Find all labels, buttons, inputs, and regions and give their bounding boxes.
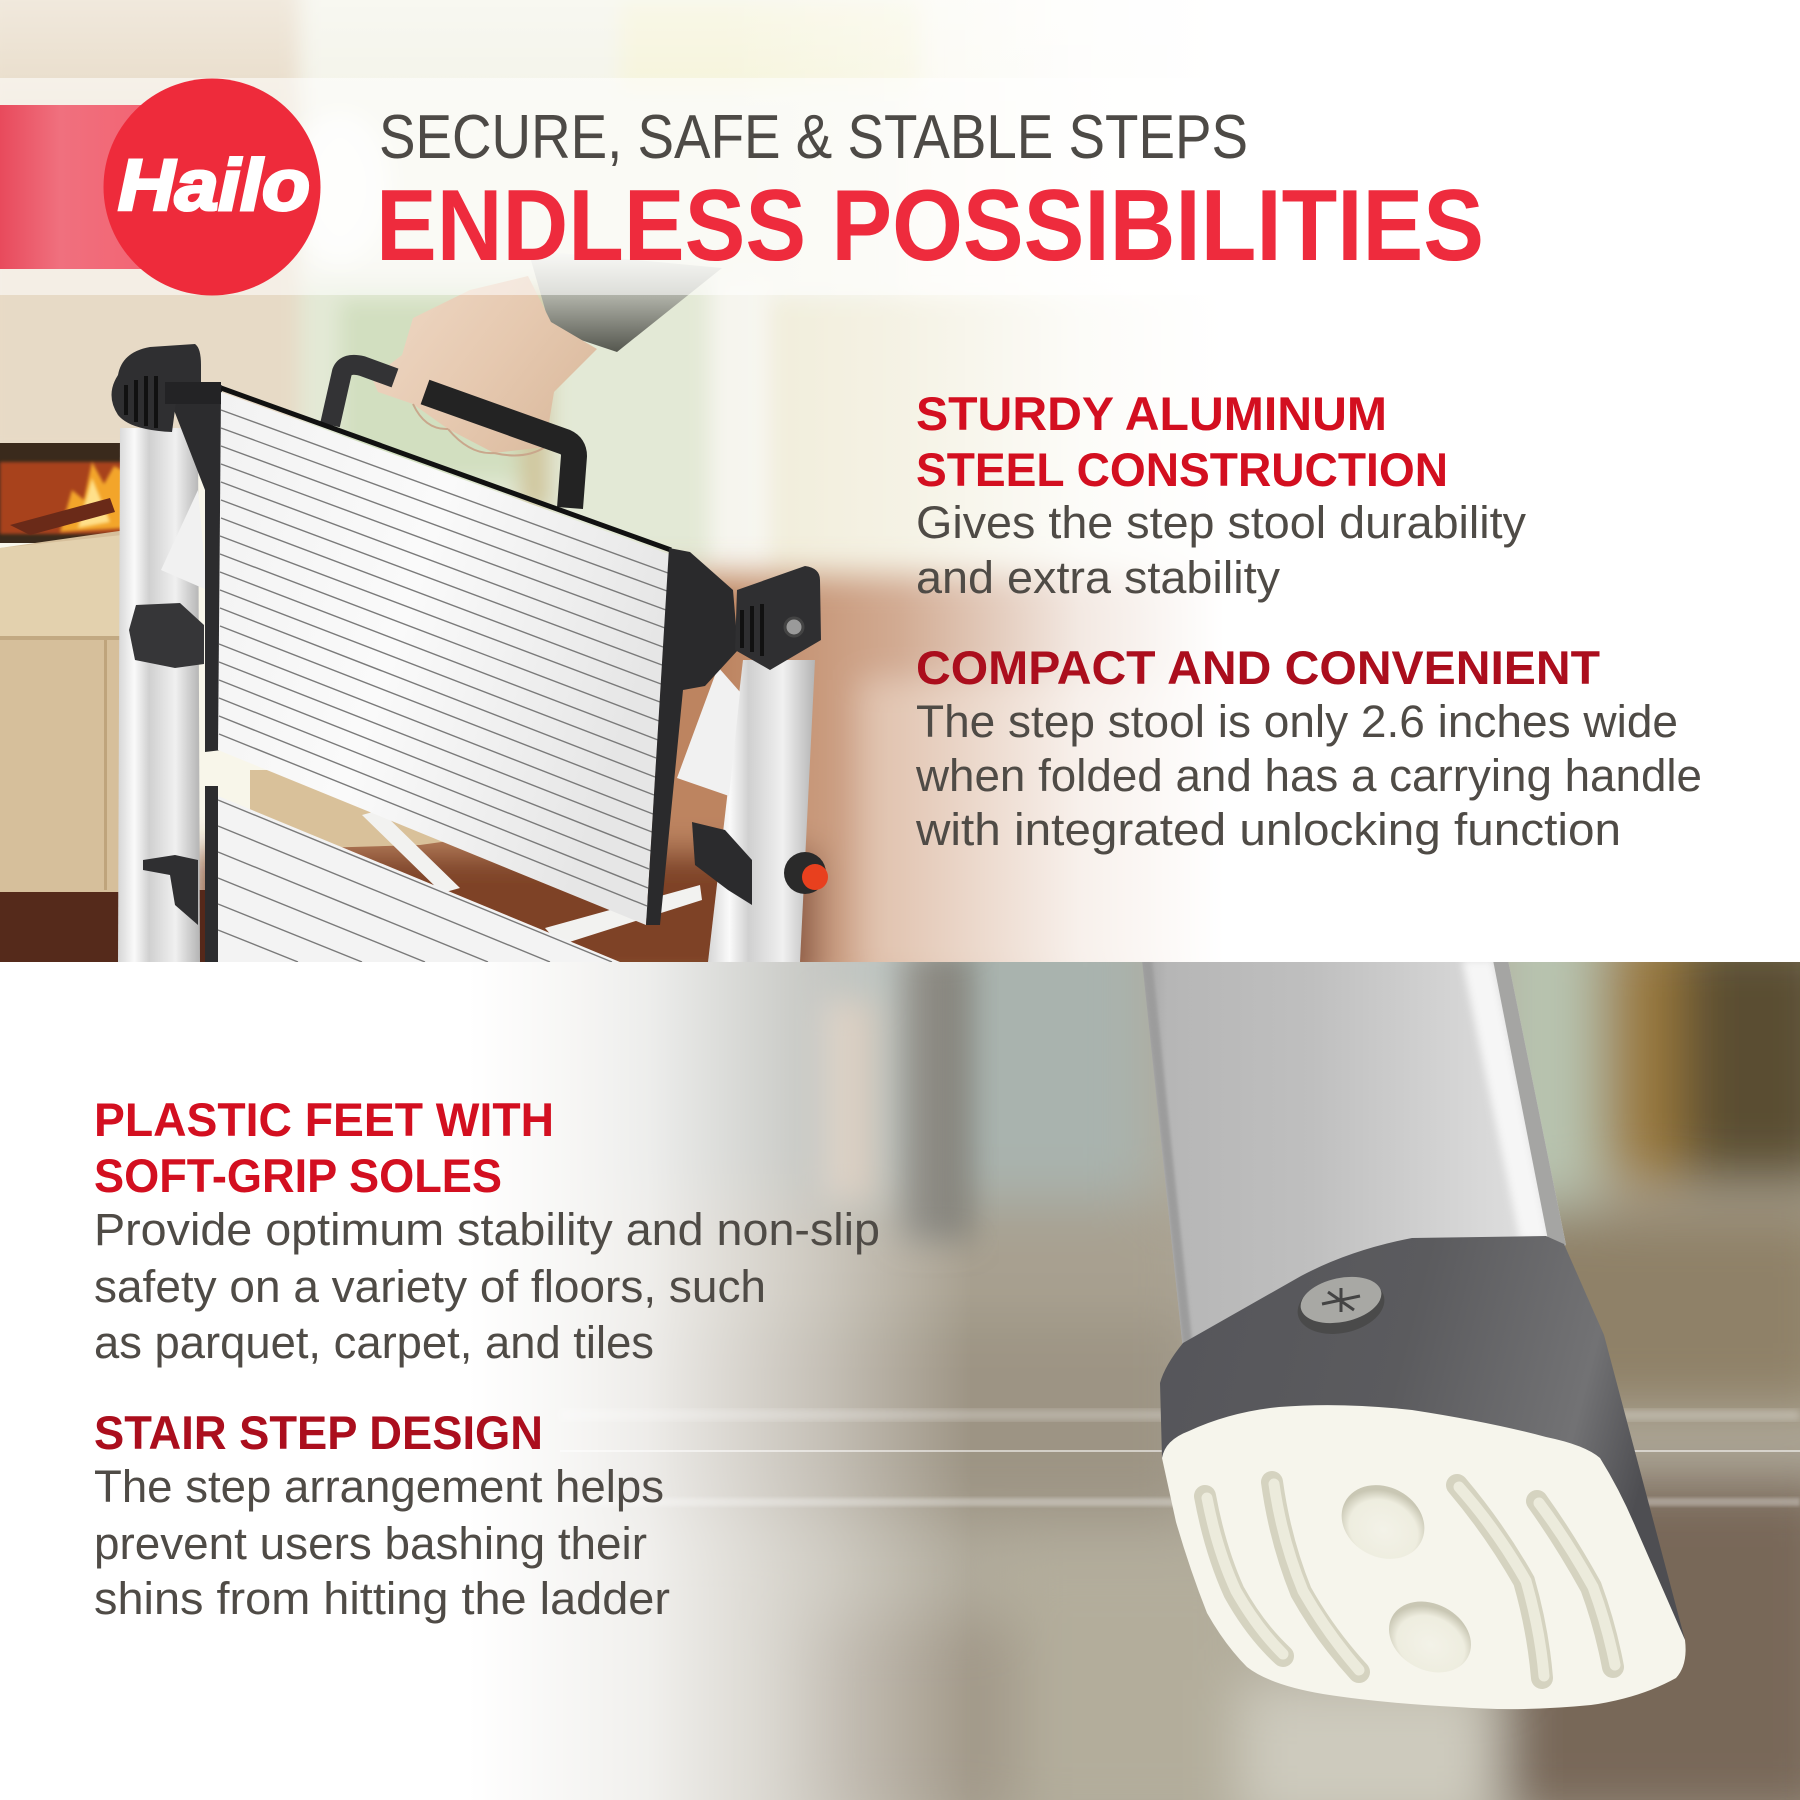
- title: ENDLESS POSSIBILITIES: [376, 170, 1484, 282]
- text block: plastic feet: as parquet, carpet, and tiles: [94, 1317, 654, 1368]
- background: blurred floor: [0, 900, 1800, 1800]
- text block: compact and convenient: [915, 641, 1702, 855]
- red button: [784, 852, 828, 894]
- text block: stair step design: The step arrangement helps: [94, 1461, 664, 1512]
- text block: plastic feet: PLASTIC FEET WITH: [94, 1093, 554, 1146]
- cross braces: [362, 810, 702, 945]
- sole ovals: [1329, 1471, 1483, 1686]
- right strip and bracket: [646, 548, 738, 925]
- text block: stair step design: STAIR STEP DESIGN: [94, 1406, 543, 1459]
- text block: compact and convenient: COMPACT AND CONVENIENT: [916, 641, 1600, 694]
- text block: stair step design: prevent users bashing their: [94, 1518, 647, 1569]
- stool illustration: [112, 250, 828, 962]
- hand: [372, 276, 597, 455]
- text block: plastic feet: safety on a variety of floors, such: [94, 1261, 766, 1312]
- text block: stair step design: shins from hitting the ladder: [94, 1573, 670, 1624]
- text block: plastic feet: [94, 1093, 880, 1368]
- text block: sturdy aluminum: STURDY ALUMINUM: [916, 387, 1387, 440]
- text block: sturdy aluminum: Gives the step stool durability: [916, 497, 1527, 548]
- knob: lower right: [692, 822, 752, 905]
- dark foot sleeve: [1160, 1236, 1685, 1640]
- sole ridges: [1205, 1482, 1615, 1678]
- logo: Hailo: Hailo: [118, 146, 310, 226]
- leg: right: [708, 660, 815, 962]
- banner strip: [0, 78, 1800, 295]
- logo: Hailo: [104, 78, 320, 296]
- text block: sturdy aluminum: STEEL CONSTRUCTION: [916, 443, 1448, 496]
- text block: plastic feet: SOFT-GRIP SOLES: [94, 1149, 502, 1202]
- text block: plastic feet: Provide optimum stability and non-slip: [94, 1204, 880, 1255]
- top-right cap: [735, 566, 821, 670]
- carrying handle: [330, 365, 574, 508]
- sofa: [0, 531, 443, 892]
- leg: left: [118, 428, 200, 962]
- top-left cap: [112, 344, 221, 432]
- text block: compact and convenient: with integrated unlocking function: [915, 804, 1621, 855]
- left bracket and strip: [172, 385, 222, 752]
- title: [376, 103, 1484, 282]
- fireplace: [0, 443, 128, 543]
- knob: middle left: [129, 603, 204, 668]
- white wedges: [161, 490, 740, 796]
- lower step panel: [205, 786, 620, 962]
- screw: [1292, 1270, 1390, 1342]
- foot illustration: [1142, 960, 1686, 1709]
- background: room scene: [0, 0, 1184, 962]
- text block: sturdy aluminum: [916, 387, 1527, 603]
- text block: stair step design: [94, 1406, 670, 1624]
- text block: sturdy aluminum: and extra stability: [916, 552, 1281, 603]
- red bar: [0, 105, 150, 269]
- knob: lower left: [143, 855, 198, 925]
- banner glow: [290, 112, 390, 262]
- white sole: [1162, 1405, 1686, 1709]
- sleeve: [532, 264, 722, 352]
- title: SECURE, SAFE & STABLE STEPS: [379, 103, 1248, 172]
- text block: compact and convenient: when folded and has a carrying handle: [915, 750, 1702, 801]
- text block: compact and convenient: The step stool is only 2.6 inches wide: [916, 696, 1678, 747]
- top step panel: [218, 388, 671, 925]
- aluminum leg: [1142, 960, 1570, 1350]
